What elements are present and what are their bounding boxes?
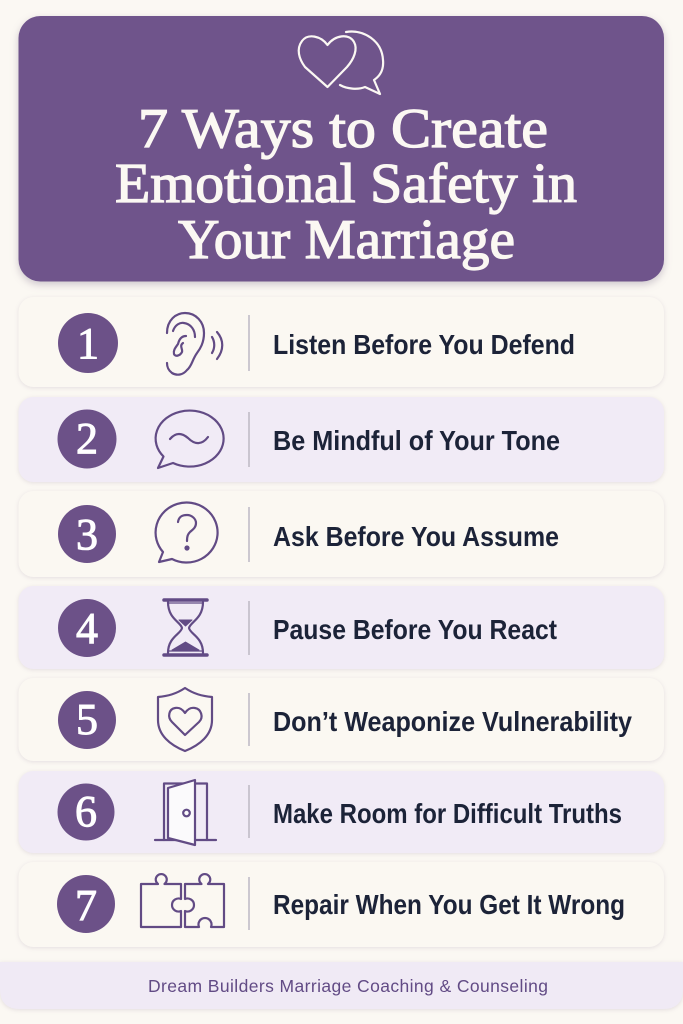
number 5 [58,691,116,749]
number 3 [58,505,116,563]
number 5: 5 [76,695,98,744]
panel: item 4 [18,586,664,669]
title [115,98,577,271]
title: Your Marriage [178,209,515,271]
number 2: 2 [76,414,98,463]
footer text: Dream Builders Marriage Coaching & Counseling [148,976,548,996]
label: Listen Before You Defend [273,329,575,360]
label: Be Mindful of Your Tone [273,425,560,456]
divider [248,315,250,371]
panel: item 6 [18,771,664,853]
icon: shield with heart [158,688,212,751]
number 4 [58,599,116,657]
panel: item 7 [18,862,664,947]
icon: heart and speech bubble [299,32,383,94]
divider [248,507,250,562]
divider [248,785,250,838]
icon: speech bubble with wave [156,411,224,468]
label: Don’t Weaponize Vulnerability [273,706,632,737]
number 7: 7 [75,881,97,930]
label: Ask Before You Assume [273,521,559,552]
label: Repair When You Get It Wrong [273,889,625,920]
footer band [0,962,683,1009]
number 6 [58,784,114,840]
panel: item 5 [18,678,664,761]
icon: hourglass [164,600,207,655]
number 1: 1 [77,319,99,368]
panel: header [18,16,664,282]
number 3: 3 [76,510,98,559]
panel: item 1 [18,297,664,387]
divider [248,601,250,655]
number 1 [58,313,118,373]
label: Pause Before You React [273,614,557,645]
divider [248,693,250,746]
number 7 [57,875,115,933]
label: Make Room for Difficult Truths [273,798,622,829]
icon: ear [167,313,222,375]
number 6: 6 [75,787,97,836]
number 2 [58,410,116,468]
title: Emotional Safety in [115,153,577,215]
icon: open door [155,780,216,845]
icon: question bubble [156,503,218,563]
divider [248,412,250,467]
divider [248,877,250,930]
icon: puzzle pieces [141,874,224,927]
title: 7 Ways to Create [138,98,548,160]
number 4: 4 [76,604,98,653]
panel: item 2 [18,397,664,482]
panel: item 3 [18,491,664,577]
